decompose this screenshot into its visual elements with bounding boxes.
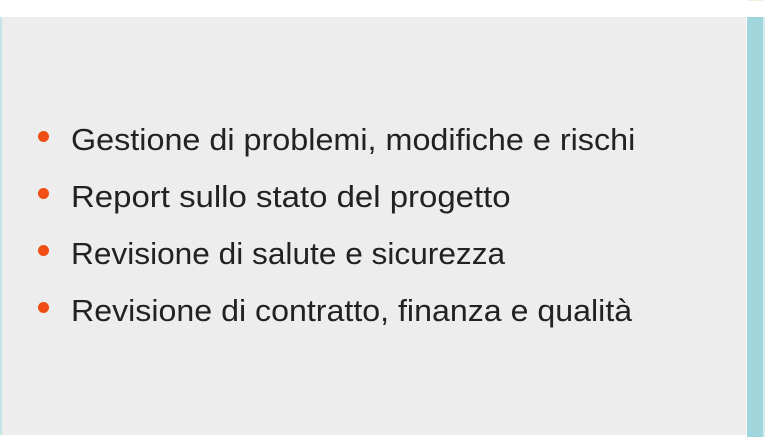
item 3 text: Revisione di salute e sicurezza xyxy=(71,236,505,271)
bullet 3 xyxy=(38,245,49,256)
top right accent line xyxy=(747,0,763,1)
bullet list xyxy=(38,122,635,328)
left teal edge xyxy=(0,17,2,435)
bullet 1 xyxy=(38,131,49,142)
item 1 text: Gestione di problemi, modifiche e rischi xyxy=(71,122,635,157)
bullet 2 xyxy=(38,188,49,199)
item 4 text: Revisione di contratto, finanza e qualità xyxy=(71,293,632,328)
right pale edge xyxy=(763,17,765,437)
item 2 text: Report sullo stato del progetto xyxy=(71,179,511,214)
right teal bar xyxy=(747,17,763,437)
bullet 4 xyxy=(38,302,49,313)
